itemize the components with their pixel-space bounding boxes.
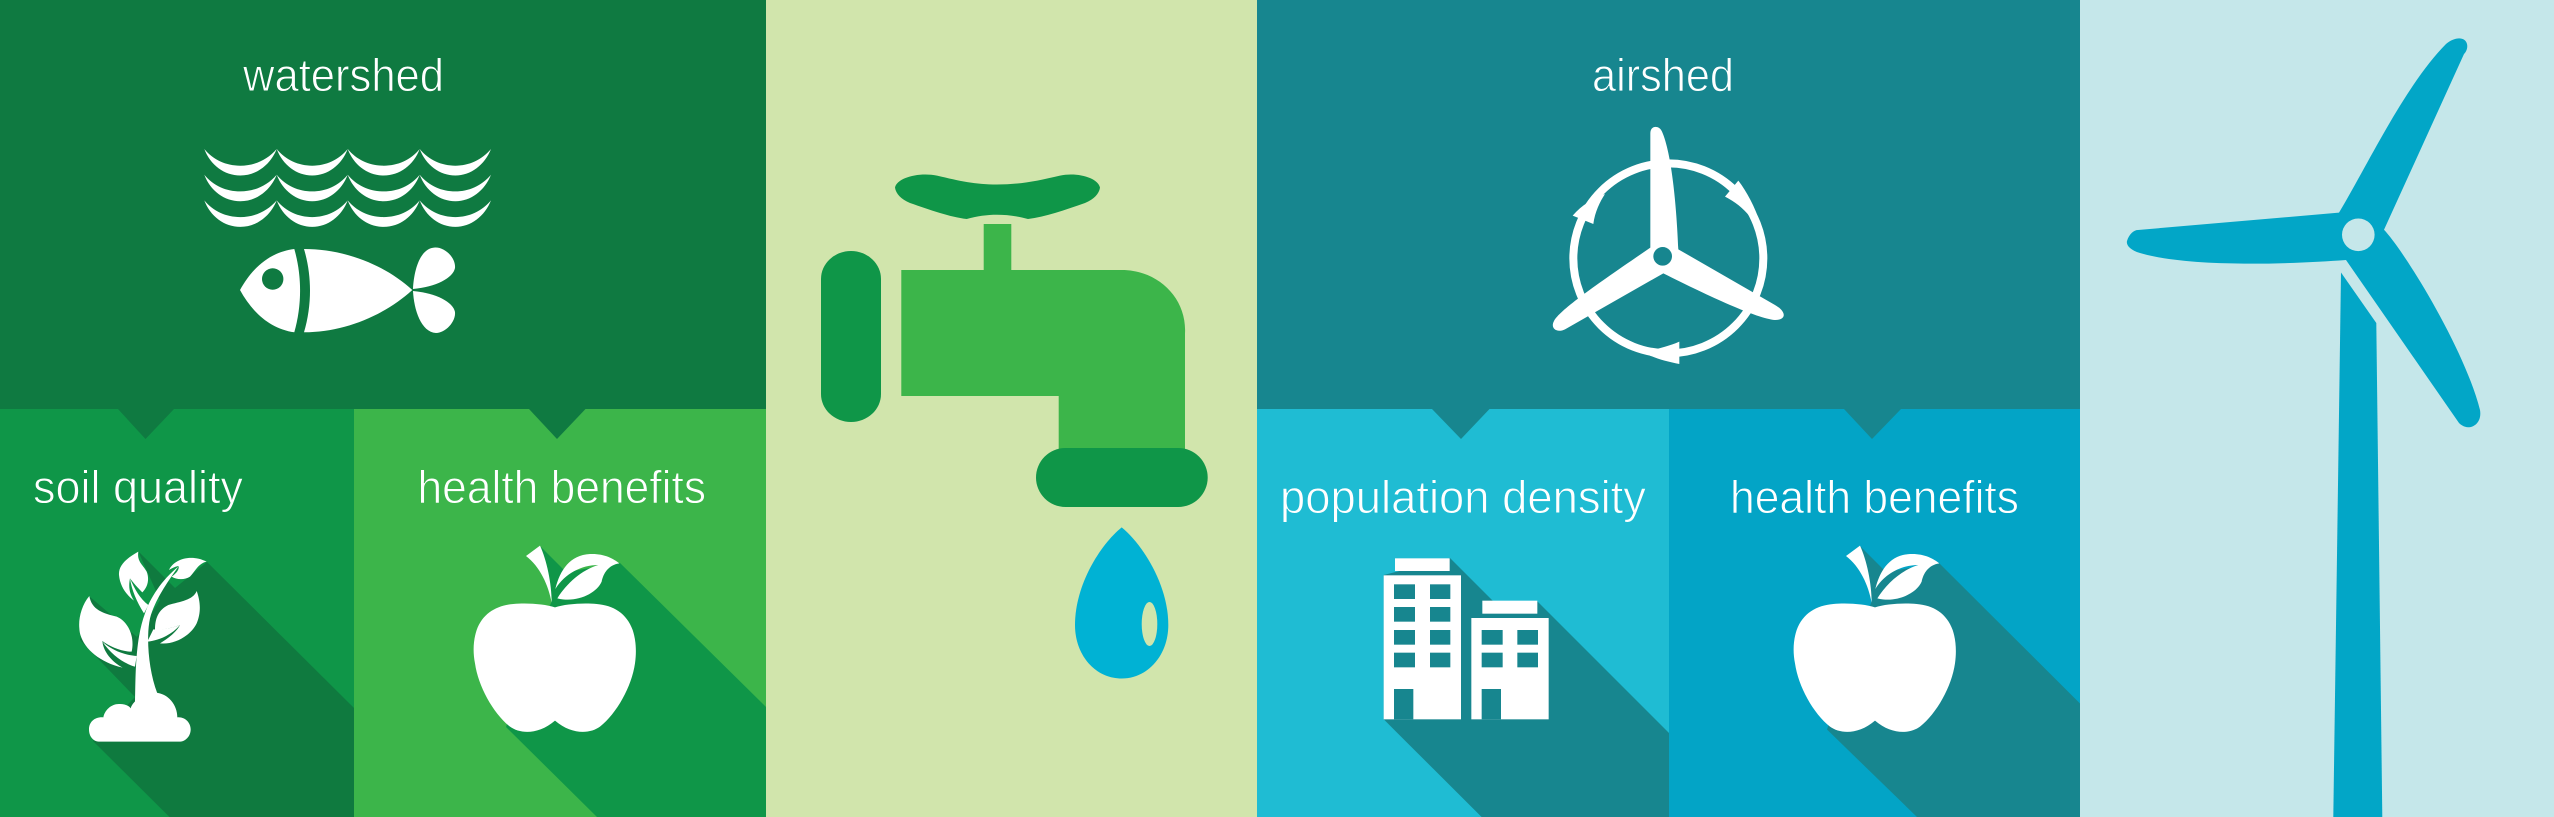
icon: green apple bbox=[474, 546, 636, 732]
heading: population density: population density bbox=[1280, 471, 1646, 523]
heading: health benefits: health benefits bbox=[418, 461, 706, 513]
blue health benefits background bbox=[1669, 409, 2080, 817]
connector notch bbox=[529, 409, 586, 439]
airshed header background bbox=[1257, 0, 2080, 409]
long shadow: green apple bbox=[506, 546, 766, 817]
panel: wind turbine bbox=[2080, 0, 2554, 817]
heading: airshed: airshed bbox=[1592, 49, 1734, 101]
icon: fish bbox=[240, 247, 455, 333]
green health benefits background bbox=[354, 409, 766, 817]
icon: turbine cycle bbox=[1553, 127, 1784, 364]
wind turbine panel background bbox=[2080, 0, 2554, 817]
icon: buildings bbox=[1384, 558, 1549, 719]
icon: plant bbox=[79, 552, 207, 742]
panel: population density bbox=[1257, 409, 1669, 817]
icon: faucet bbox=[821, 175, 1208, 507]
long shadow: blue apple bbox=[1827, 546, 2080, 817]
long shadow: plant bbox=[80, 551, 354, 817]
panel: soil quality bbox=[0, 409, 354, 817]
panel: faucet bbox=[766, 0, 1257, 817]
icon: wind turbine bbox=[2127, 38, 2480, 817]
heading: watershed: watershed bbox=[242, 49, 444, 101]
panel: health benefits (green) bbox=[354, 409, 766, 817]
panel: health benefits (blue) bbox=[1669, 409, 2080, 817]
panel: watershed bbox=[0, 0, 766, 409]
heading: health benefits: health benefits bbox=[1730, 471, 2019, 523]
icon: blue apple bbox=[1794, 546, 1956, 732]
connector notch bbox=[1844, 409, 1901, 439]
soil quality background bbox=[0, 409, 354, 817]
connector notch bbox=[118, 409, 174, 439]
faucet panel background bbox=[766, 0, 1257, 817]
heading: soil quality: soil quality bbox=[33, 461, 243, 513]
panel: airshed bbox=[1257, 0, 2080, 409]
connector notch bbox=[1432, 409, 1490, 439]
long shadow: buildings bbox=[1384, 558, 1669, 817]
icon: water drop bbox=[1075, 527, 1168, 678]
population density background bbox=[1257, 409, 1669, 817]
watershed header background bbox=[0, 0, 766, 409]
icon: waves bbox=[204, 149, 491, 227]
